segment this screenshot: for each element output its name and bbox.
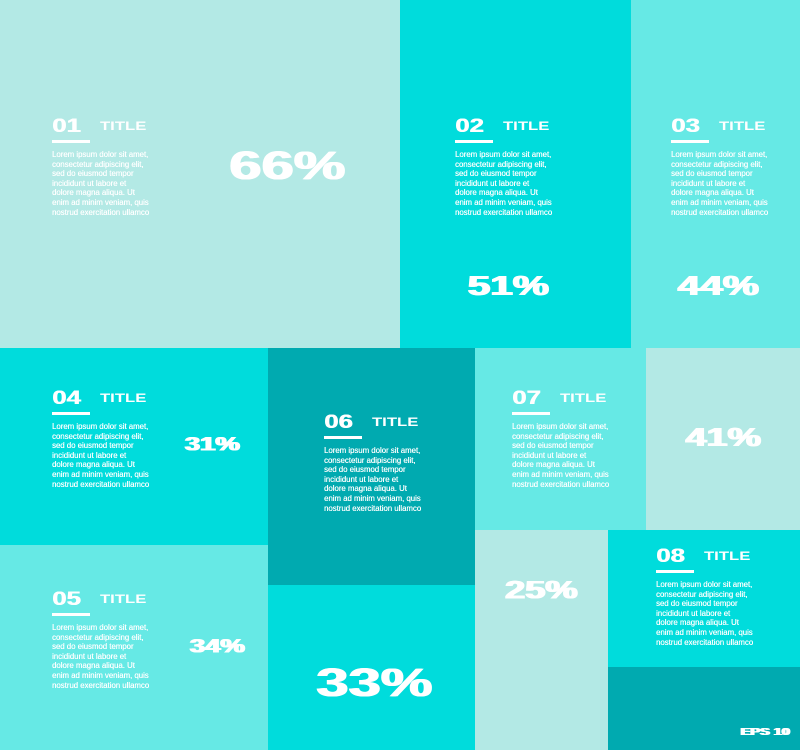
panel: 01 <box>0 0 400 348</box>
text block 07: sed do eiusmod tempor <box>512 441 593 450</box>
text block 06: TITLE <box>372 417 418 429</box>
text block 04: sed do eiusmod tempor <box>52 441 133 450</box>
text block 03: 03 <box>671 116 700 137</box>
text block 04: nostrud exercitation ullamco <box>52 480 149 489</box>
text block 01: consectetur adipiscing elit, <box>52 160 143 169</box>
text block 08: sed do eiusmod tempor <box>656 599 737 608</box>
text block 02: TITLE <box>503 121 549 133</box>
text block 02 <box>455 116 552 217</box>
text block 03: incididunt ut labore et <box>671 179 745 188</box>
percentage 41: 41% <box>685 422 761 452</box>
text block 07: nostrud exercitation ullamco <box>512 480 609 489</box>
text block 05: enim ad minim veniam, quis <box>52 671 149 680</box>
panel: 08 <box>608 530 800 667</box>
text block 02: enim ad minim veniam, quis <box>455 198 552 207</box>
text block 06: consectetur adipiscing elit, <box>324 456 415 465</box>
text block 05: Lorem ipsum dolor sit amet, <box>52 623 148 632</box>
text block 05: dolore magna aliqua. Ut <box>52 661 135 670</box>
panel: 02 <box>400 0 631 348</box>
text block 06: Lorem ipsum dolor sit amet, <box>324 446 420 455</box>
text block 01: dolore magna aliqua. Ut <box>52 188 135 197</box>
panel: 04 <box>0 348 268 545</box>
text block 08: nostrud exercitation ullamco <box>656 638 753 647</box>
text block 04: enim ad minim veniam, quis <box>52 470 149 479</box>
text block 02: Lorem ipsum dolor sit amet, <box>455 150 551 159</box>
text block 01 <box>52 116 149 217</box>
text block 02: nostrud exercitation ullamco <box>455 208 552 217</box>
text block 06 <box>324 412 421 513</box>
percentage 51: 51% <box>467 270 549 301</box>
text block 01: incididunt ut labore et <box>52 179 126 188</box>
text block 01: sed do eiusmod tempor <box>52 169 133 178</box>
text block 08: 08 <box>656 546 685 567</box>
text block 01: Lorem ipsum dolor sit amet, <box>52 150 148 159</box>
text block 02: 02 <box>455 116 484 137</box>
text block 05: consectetur adipiscing elit, <box>52 633 143 642</box>
text block 01: enim ad minim veniam, quis <box>52 198 149 207</box>
text block 08: TITLE <box>704 551 750 563</box>
text block 07 <box>512 388 609 489</box>
text block 08: dolore magna aliqua. Ut <box>656 618 739 627</box>
text block 03: consectetur adipiscing elit, <box>671 160 762 169</box>
text block 05: 05 <box>52 589 81 610</box>
text block 05: incididunt ut labore et <box>52 652 126 661</box>
text block 02: sed do eiusmod tempor <box>455 169 536 178</box>
text block 07: 07 <box>512 388 541 409</box>
text block 08 <box>656 546 753 647</box>
text block 04: consectetur adipiscing elit, <box>52 432 143 441</box>
text block 06: 06 <box>324 412 353 433</box>
text block 05: TITLE <box>100 594 146 606</box>
panel: 06 <box>268 348 475 585</box>
text block 03: TITLE <box>719 121 765 133</box>
panel: 33 <box>268 585 475 750</box>
text block 05: nostrud exercitation ullamco <box>52 681 149 690</box>
text block 07: enim ad minim veniam, quis <box>512 470 609 479</box>
text block 08: Lorem ipsum dolor sit amet, <box>656 580 752 589</box>
text block 03: sed do eiusmod tempor <box>671 169 752 178</box>
text block 03: enim ad minim veniam, quis <box>671 198 768 207</box>
text block 06: enim ad minim veniam, quis <box>324 494 421 503</box>
text block 06: dolore magna aliqua. Ut <box>324 484 407 493</box>
percentage 33: 33% <box>316 661 432 705</box>
text block 04: incididunt ut labore et <box>52 451 126 460</box>
text block 02: incididunt ut labore et <box>455 179 529 188</box>
text block 07: incididunt ut labore et <box>512 451 586 460</box>
text block 03: nostrud exercitation ullamco <box>671 208 768 217</box>
text block 01: TITLE <box>100 121 146 133</box>
text block 04: dolore magna aliqua. Ut <box>52 460 135 469</box>
text block 06: nostrud exercitation ullamco <box>324 504 421 513</box>
text block 02: dolore magna aliqua. Ut <box>455 188 538 197</box>
text block 01: nostrud exercitation ullamco <box>52 208 149 217</box>
percentage 66: 66% <box>229 144 345 188</box>
text block 03: dolore magna aliqua. Ut <box>671 188 754 197</box>
percentage 44: 44% <box>677 270 759 301</box>
panel: 41 <box>646 348 800 530</box>
text block 06: sed do eiusmod tempor <box>324 465 405 474</box>
panel: 03 <box>631 0 800 348</box>
text block 07: Lorem ipsum dolor sit amet, <box>512 422 608 431</box>
percentage 25: 25% <box>505 576 577 604</box>
panel: bottom right <box>608 667 800 750</box>
text block 08: incididunt ut labore et <box>656 609 730 618</box>
text block 05: sed do eiusmod tempor <box>52 642 133 651</box>
text block 03 <box>671 116 768 217</box>
text block 07: TITLE <box>560 393 606 405</box>
text block 06: incididunt ut labore et <box>324 475 398 484</box>
text block 04: 04 <box>52 388 81 409</box>
panel: 07 <box>475 348 646 530</box>
text block 01: 01 <box>52 116 81 137</box>
text block 02: consectetur adipiscing elit, <box>455 160 546 169</box>
panel: 05 <box>0 545 268 750</box>
text block 08: enim ad minim veniam, quis <box>656 628 753 637</box>
text block 05 <box>52 589 149 690</box>
text block 04: TITLE <box>100 393 146 405</box>
text block 08: consectetur adipiscing elit, <box>656 590 747 599</box>
label: EPS 10: EPS 10 <box>740 727 790 738</box>
panel: 25 <box>475 530 608 750</box>
text block 04 <box>52 388 149 489</box>
percentage 31: 31% <box>184 434 240 456</box>
text block 04: Lorem ipsum dolor sit amet, <box>52 422 148 431</box>
text block 03: Lorem ipsum dolor sit amet, <box>671 150 767 159</box>
text block 07: dolore magna aliqua. Ut <box>512 460 595 469</box>
text block 07: consectetur adipiscing elit, <box>512 432 603 441</box>
percentage 34: 34% <box>189 636 245 658</box>
